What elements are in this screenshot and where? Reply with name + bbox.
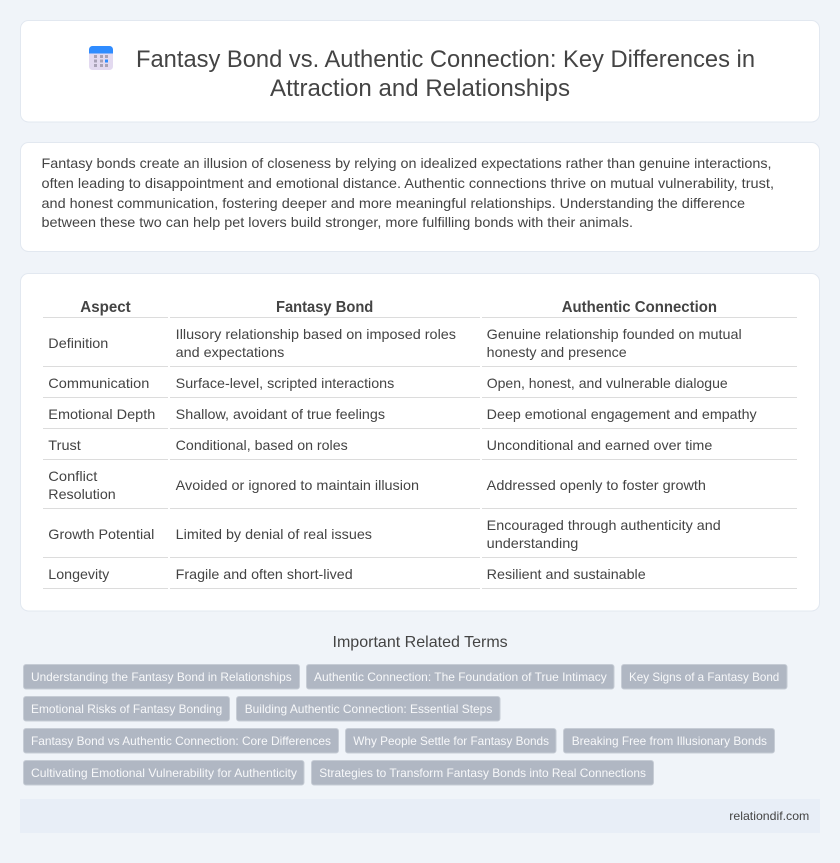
text block: introduction paragraph: and honest communication, fostering deeper and more meaningful relationships. Understanding the difference bbox=[42, 195, 745, 211]
row: definition: honesty and presence bbox=[487, 344, 627, 360]
row: conflict resolution: Conflict bbox=[48, 468, 97, 484]
tag: Building Authentic Connection: Essential Steps bbox=[245, 702, 492, 716]
tag: Breaking Free from Illusionary Bonds bbox=[572, 734, 767, 748]
tag: Key Signs of a Fantasy Bond bbox=[629, 670, 779, 684]
tag: Emotional Risks of Fantasy Bonding bbox=[31, 702, 222, 716]
row: emotional depth: Deep emotional engagement and empathy bbox=[487, 406, 757, 422]
row: communication: Surface-level, scripted interactions bbox=[176, 375, 394, 391]
text block: introduction paragraph bbox=[42, 155, 774, 230]
tag bbox=[24, 696, 230, 721]
row: definition: Definition bbox=[48, 335, 108, 351]
row: conflict resolution bbox=[48, 468, 706, 502]
row: emotional depth bbox=[48, 406, 757, 422]
row: conflict resolution: Resolution bbox=[48, 486, 116, 502]
tag bbox=[346, 728, 556, 753]
table header bbox=[80, 299, 717, 316]
row: emotional depth: Shallow, avoidant of true feelings bbox=[176, 406, 385, 422]
table header: Fantasy Bond bbox=[276, 299, 373, 316]
tag: Why People Settle for Fantasy Bonds bbox=[353, 734, 549, 748]
tag: Cultivating Emotional Vulnerability for Authenticity bbox=[31, 766, 297, 780]
row: longevity bbox=[48, 566, 646, 582]
table header: Authentic Connection bbox=[562, 299, 717, 316]
text block: introduction paragraph: between these two can help pet lovers build stronger, more fulfilling bonds with their animals. bbox=[42, 214, 633, 230]
icon: calendar bbox=[89, 46, 113, 70]
title: Attraction and Relationships bbox=[270, 75, 570, 102]
row: longevity: Longevity bbox=[48, 566, 109, 582]
row: trust: Unconditional and earned over time bbox=[487, 437, 713, 453]
row: conflict resolution: Addressed openly to foster growth bbox=[487, 477, 706, 493]
tag bbox=[24, 728, 338, 753]
row: conflict resolution: Avoided or ignored to maintain illusion bbox=[176, 477, 419, 493]
row: definition: Genuine relationship founded on mutual bbox=[487, 326, 742, 342]
row: longevity: Fragile and often short-lived bbox=[176, 566, 353, 582]
row: communication bbox=[48, 375, 728, 391]
row: longevity: Resilient and sustainable bbox=[487, 566, 646, 582]
row: communication: Communication bbox=[48, 375, 149, 391]
tag bbox=[24, 664, 300, 689]
tag: Authentic Connection: The Foundation of True Intimacy bbox=[314, 670, 607, 684]
footer: relationdif.com bbox=[729, 809, 809, 823]
tag bbox=[306, 664, 614, 689]
heading: important related terms: Important Related Terms bbox=[332, 634, 508, 651]
tag bbox=[622, 664, 787, 689]
row: emotional depth: Emotional Depth bbox=[48, 406, 155, 422]
panel: related term tags bbox=[24, 664, 787, 785]
panel: comparison table bbox=[20, 274, 820, 611]
row: growth potential: understanding bbox=[487, 535, 578, 551]
row: growth potential bbox=[48, 517, 721, 551]
tag bbox=[564, 728, 774, 753]
row: communication: Open, honest, and vulnerable dialogue bbox=[487, 375, 728, 391]
tag: Fantasy Bond vs Authentic Connection: Core Differences bbox=[31, 734, 331, 748]
text block: introduction paragraph: Fantasy bonds create an illusion of closeness by relying on idealized expectations rather than genuine interactions, bbox=[42, 155, 772, 171]
row: growth potential: Limited by denial of real issues bbox=[176, 526, 372, 542]
text block: introduction paragraph: often leading to disappointment and emotional distance. Authentic connections thrive on mutual vulnerability, trust, bbox=[42, 175, 774, 191]
tag bbox=[24, 760, 304, 785]
title bbox=[136, 46, 755, 102]
tag bbox=[236, 696, 500, 721]
row: growth potential: Growth Potential bbox=[48, 526, 154, 542]
tag: Strategies to Transform Fantasy Bonds into Real Connections bbox=[319, 766, 646, 780]
row: definition bbox=[48, 326, 742, 360]
row: trust: Conditional, based on roles bbox=[176, 437, 348, 453]
table header: Aspect bbox=[80, 299, 131, 316]
row: trust bbox=[48, 437, 713, 453]
row: trust: Trust bbox=[48, 437, 81, 453]
row: growth potential: Encouraged through authenticity and bbox=[487, 517, 721, 533]
title: Fantasy Bond vs. Authentic Connection: Key Differences in bbox=[136, 46, 755, 73]
footer bbox=[20, 799, 820, 833]
panel: header bbox=[20, 20, 820, 122]
tag: Understanding the Fantasy Bond in Relationships bbox=[31, 670, 292, 684]
panel: introduction bbox=[20, 142, 820, 252]
tag bbox=[312, 760, 654, 785]
row: definition: Illusory relationship based on imposed roles bbox=[176, 326, 456, 342]
row: definition: and expectations bbox=[176, 344, 284, 360]
